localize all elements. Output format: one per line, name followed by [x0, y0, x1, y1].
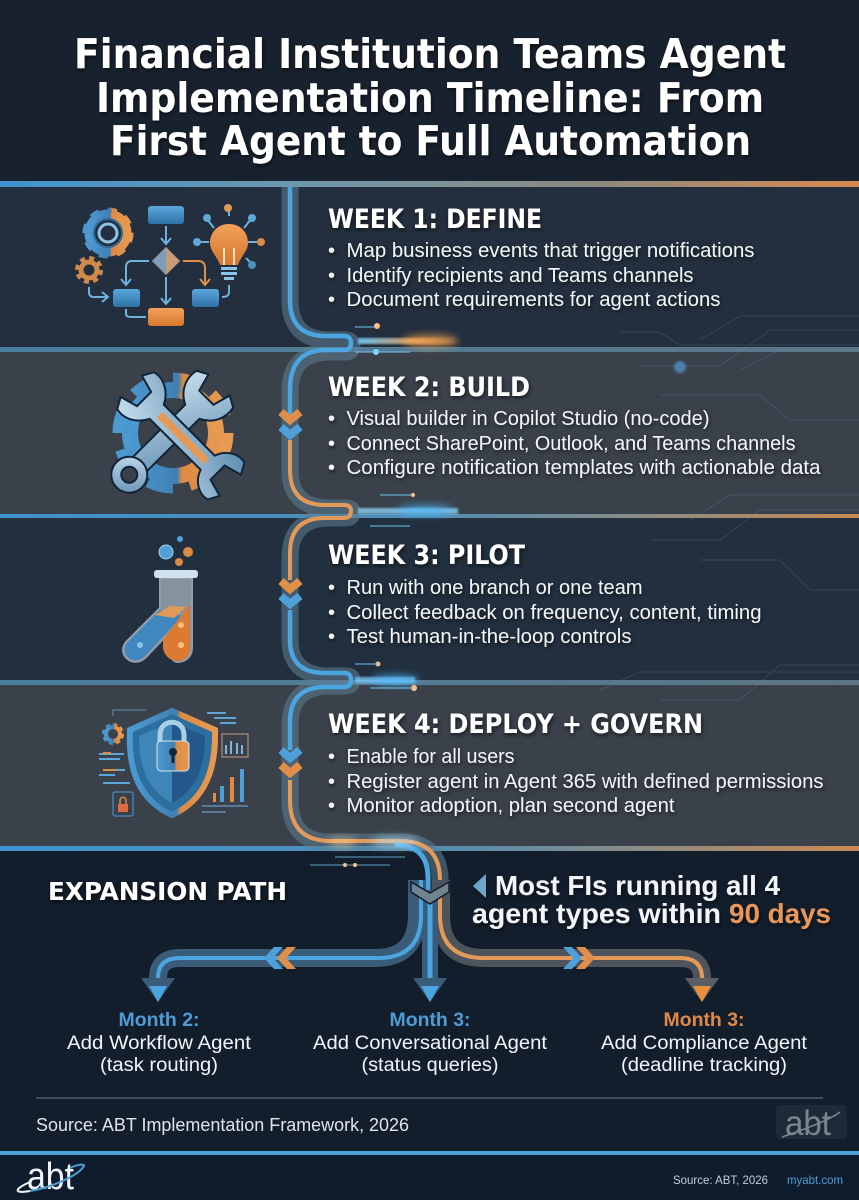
month 3 conversational agent	[313, 1010, 548, 1076]
text: week 2 build: Connect SharePoint, Outlook, and Teams channels	[346, 433, 796, 455]
text: week 3 pilot: •	[328, 577, 335, 599]
text: week 4 deploy and govern: Register agent in Agent 365 with defined permissions	[346, 771, 824, 793]
heading: expansion path: EXPANSION PATH	[48, 877, 287, 906]
text: week 1 define: •	[328, 289, 335, 311]
month 2 workflow agent: Add Workflow Agent	[67, 1033, 252, 1054]
circuit glow: week 3 to 4	[355, 662, 419, 691]
month 2 workflow agent: Month 2:	[118, 1010, 200, 1031]
text: week 1 define: Map business events that trigger notifications	[346, 240, 754, 262]
text: week 2 build: Visual builder in Copilot Studio (no-code)	[346, 408, 710, 430]
footer source: Source: ABT, 2026	[673, 1173, 768, 1187]
month 3 conversational agent: Month 3:	[390, 1010, 470, 1031]
month 2 workflow agent	[67, 1010, 252, 1076]
text: week 1 define: Document requirements for agent actions	[346, 289, 720, 311]
footer link: myabt.com	[787, 1173, 843, 1187]
text: week 1 define: WEEK 1: DEFINE	[328, 204, 542, 235]
callout: 90 days: Most FIs running all 4	[495, 870, 780, 901]
expansion branches	[158, 880, 702, 990]
title	[74, 30, 786, 165]
text: week 3 pilot: WEEK 3: PILOT	[328, 540, 526, 571]
arrow chevrons on timeline	[281, 412, 300, 773]
panel: week 1 background	[0, 187, 859, 348]
timeline path: weeks 1 to 4	[290, 187, 440, 900]
month 3 compliance agent: Add Compliance Agent	[601, 1033, 808, 1054]
circuit glow: week 2 to 3	[358, 493, 458, 526]
text: week 4 deploy and govern: •	[328, 771, 335, 793]
small gear	[77, 258, 101, 282]
text: week 4 deploy and govern: •	[328, 746, 335, 768]
text: week 3 pilot: •	[328, 602, 335, 624]
title: Financial Institution Teams Agent	[74, 30, 786, 78]
circuit glow: week 1 to 2	[355, 323, 686, 373]
icon: planning flowchart with gears and lightbulb	[77, 204, 265, 326]
icon: shield with padlock	[99, 710, 248, 816]
text: week 4 deploy and govern: •	[328, 795, 335, 817]
source line: Source: ABT Implementation Framework, 2026	[36, 1115, 409, 1135]
text: week 1 define: •	[328, 265, 335, 287]
text: week 3 pilot: Run with one branch or one team	[346, 577, 642, 599]
footer bar	[0, 1151, 859, 1200]
panel: week 2 background	[0, 352, 859, 514]
text: week 4 deploy and govern: Monitor adoption, plan second agent	[346, 795, 675, 817]
text: week 1 define: •	[328, 240, 335, 262]
callout: 90 days: agent types within	[472, 898, 721, 929]
callout: 90 days	[472, 870, 831, 929]
text: week 3 pilot: Collect feedback on frequency, content, timing	[346, 602, 762, 624]
flowchart	[89, 206, 229, 326]
title: Implementation Timeline: From	[96, 74, 764, 122]
panel: week 4 background	[0, 685, 859, 846]
text: week 3 pilot: •	[328, 626, 335, 648]
text: week 3 pilot: Test human-in-the-loop controls	[346, 626, 632, 648]
data lines and charts	[99, 710, 248, 812]
text: week 4 deploy and govern: WEEK 4: DEPLOY + GOVERN	[328, 709, 703, 740]
icon: test tubes	[123, 536, 198, 662]
month 3 conversational agent: Add Conversational Agent	[313, 1033, 548, 1054]
text: week 4 deploy and govern: Enable for all users	[346, 746, 514, 768]
text: week 3 pilot	[328, 540, 762, 648]
arrowheads	[141, 978, 719, 1002]
month 3 compliance agent	[601, 1010, 808, 1076]
text: week 2 build: •	[328, 457, 335, 479]
month 3 compliance agent: (deadline tracking)	[621, 1055, 787, 1076]
footer logo: abt	[27, 1156, 74, 1198]
text: week 1 define: Identify recipients and Teams channels	[346, 265, 694, 287]
lightbulb	[193, 204, 265, 280]
title band background	[0, 0, 859, 181]
month 3 conversational agent: (status queries)	[362, 1055, 498, 1076]
text: week 2 build: Configure notification templates with actionable data	[346, 457, 821, 479]
panel: week 3 background	[0, 518, 859, 681]
month 3 compliance agent: Month 3:	[664, 1010, 744, 1031]
watermark logo: abt	[785, 1104, 831, 1143]
gear	[104, 725, 122, 743]
watermark logo	[776, 1104, 847, 1143]
branch chevrons	[264, 882, 595, 969]
text: week 2 build: WEEK 2: BUILD	[328, 372, 530, 403]
circuit glow: week 4 to expansion	[310, 837, 419, 867]
large gear	[85, 210, 131, 256]
text: week 2 build: •	[328, 408, 335, 430]
text: week 1 define	[328, 204, 754, 311]
title: First Agent to Full Automation	[110, 117, 751, 165]
text: week 2 build: •	[328, 433, 335, 455]
callout: 90 days: 90 days	[729, 898, 831, 929]
icon: gear with crossed wrenches	[98, 366, 249, 506]
month 2 workflow agent: (task routing)	[100, 1055, 218, 1076]
text: week 2 build	[328, 372, 821, 479]
text: week 4 deploy and govern	[328, 709, 824, 817]
